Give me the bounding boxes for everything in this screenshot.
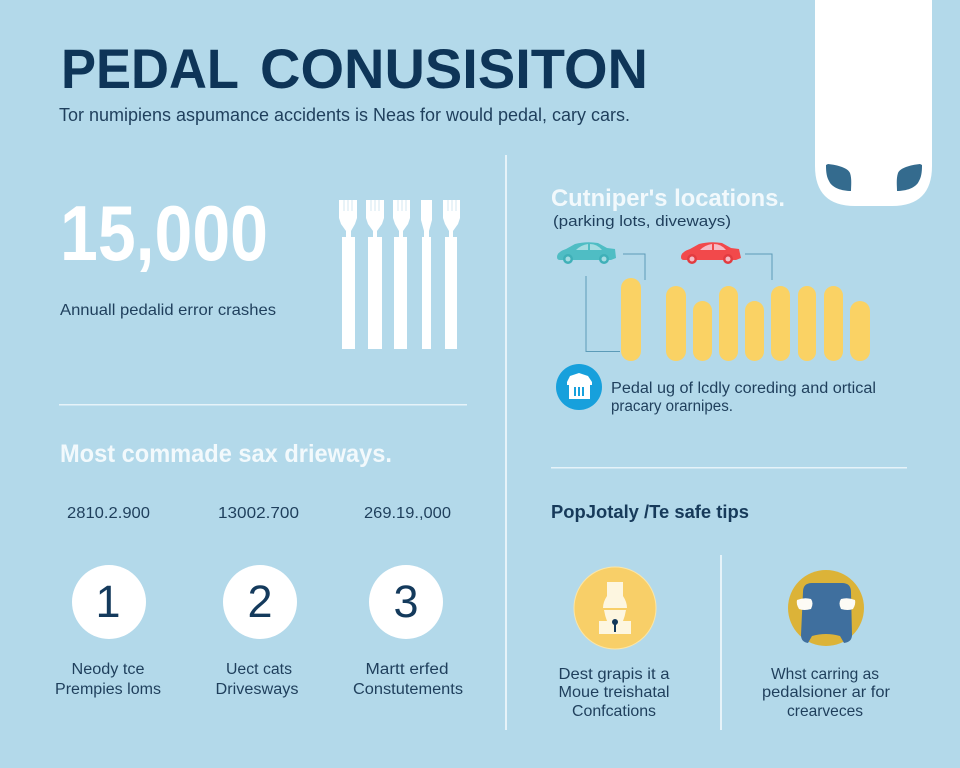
tip 2: crearveces (787, 703, 863, 720)
figures row: 269.19.,000 (364, 505, 451, 522)
figures row: 2810.2.900 (67, 505, 150, 522)
ranked item 3: Constutements (353, 681, 463, 698)
figures row (67, 505, 451, 522)
icon: teal car (557, 242, 616, 264)
title: CONUSISITON (260, 37, 648, 100)
centre divider (505, 155, 507, 730)
ranked item 2: 2 (247, 576, 273, 627)
ranked item 1: 1 (95, 576, 121, 627)
subtitle: Tor numipiens aspumance accidents is Neas for would pedal, cary cars. (59, 105, 630, 125)
icon: white mascot shape with eyes (815, 0, 932, 206)
connector arrows (586, 254, 772, 352)
title: PEDAL (61, 37, 239, 100)
ranked item 3: 3 (393, 576, 419, 627)
heading: most common: Most commade sax drieways. (60, 440, 392, 468)
ranked item 2 (216, 565, 299, 698)
icon: row of white fork pedals (339, 200, 460, 349)
figures row: 13002.700 (218, 505, 299, 522)
ranked item 3: Martt erfed (366, 661, 448, 678)
ranked item 2: Drivesways (216, 681, 299, 698)
location note: pracary orarnipes. (611, 398, 733, 415)
location note: Pedal ug of lcdly coreding and ortical (611, 380, 876, 397)
ranked item 1: Prempies loms (55, 681, 161, 698)
tip 1 (558, 567, 670, 720)
tip 2: Whst carring as (771, 666, 879, 683)
ranked item 2: Uect cats (226, 661, 292, 678)
tip 2 (762, 570, 891, 720)
tip 1: Moue treishatal (558, 684, 670, 701)
divider right (551, 467, 907, 468)
tip 1: Confcations (572, 703, 656, 720)
ranked item 1 (55, 565, 161, 698)
heading: safe tips: PopJotaly /Te safe tips (551, 502, 749, 522)
statistic caption: Annuall pedalid error crashes (60, 302, 276, 319)
tip 1: Dest grapis it a (558, 666, 670, 683)
ranked item 3 (353, 565, 463, 698)
locations subheading: (parking lots, diveways) (553, 213, 731, 230)
heading: locations: Cutniper's locations. (551, 185, 785, 212)
tips divider (720, 555, 722, 730)
icon: blue building badge (556, 364, 602, 410)
divider left (59, 404, 467, 406)
title (61, 37, 648, 100)
big statistic: 15,000 (60, 189, 268, 277)
bar chart (621, 278, 870, 361)
icon: red car (681, 242, 741, 264)
tip 2: pedalsioner ar for (762, 684, 891, 701)
ranked item 1: Neody tce (72, 661, 144, 678)
location note (611, 380, 876, 415)
